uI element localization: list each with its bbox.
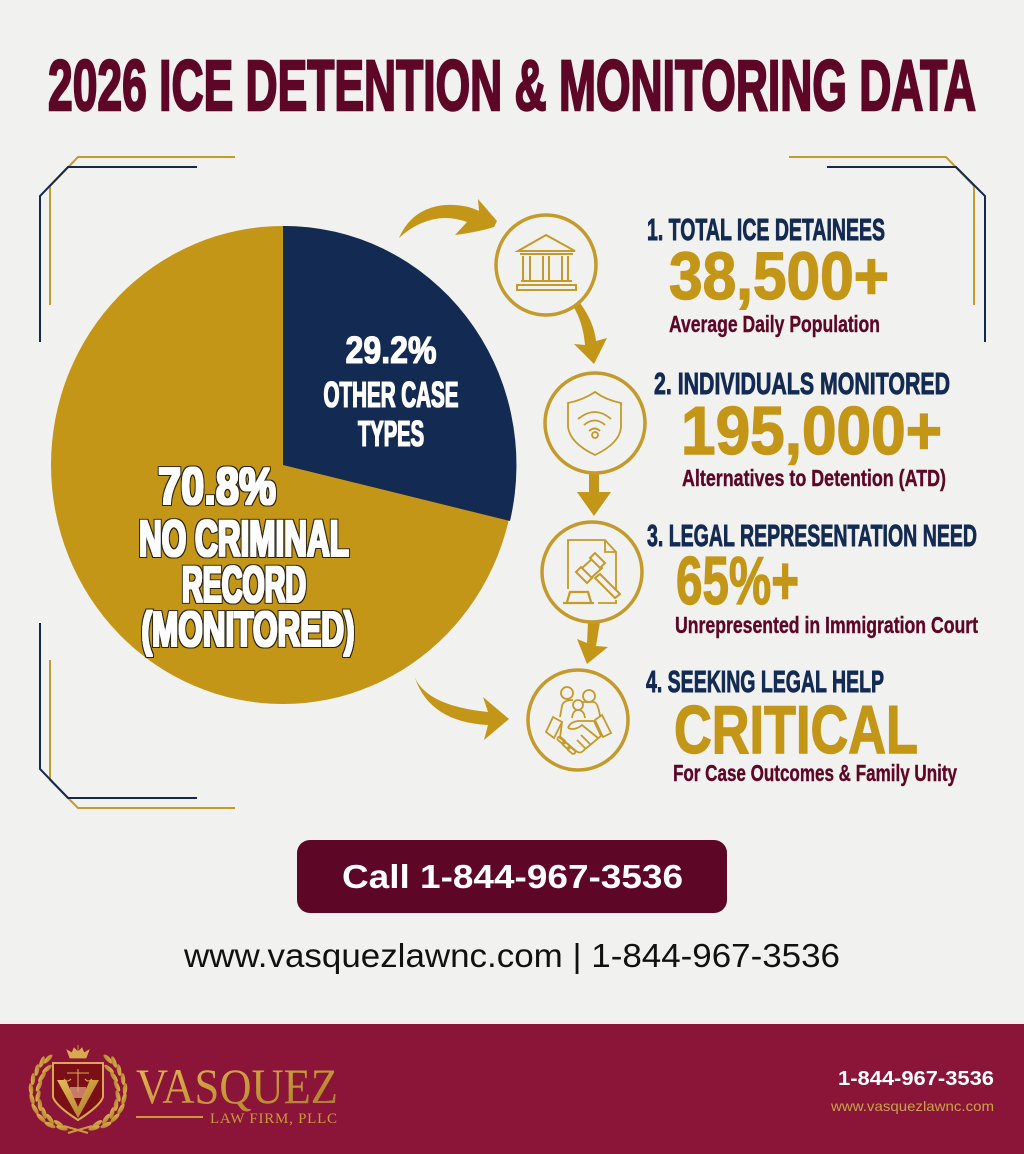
call button: Call 1-844-967-3536: [342, 858, 683, 895]
stat 1: total ICE detainees: Average Daily Population: [669, 311, 880, 337]
icon: courthouse: [496, 215, 596, 315]
label: 70.8% no criminal record: NO CRIMINAL: [139, 510, 349, 567]
label: 29.2% other case types: TYPES: [358, 413, 424, 454]
stat 2: individuals monitored: Alternatives to Detention (ATD): [682, 465, 946, 491]
label: 29.2% other case types: 29.2%: [346, 330, 436, 372]
label: 70.8% no criminal record: [139, 458, 354, 657]
stat 4: seeking legal help: 4. SEEKING LEGAL HELP: [646, 664, 884, 699]
footer band: [0, 1024, 1024, 1154]
arrow: pie to step 4: [415, 678, 509, 740]
label: 70.8% no criminal record: 70.8%: [158, 458, 276, 516]
label: 70.8% no criminal record: (MONITORED): [142, 603, 354, 657]
stat 1: total ICE detainees: 1. TOTAL ICE DETAINEES: [647, 212, 885, 247]
label: 29.2% other case types: [324, 330, 458, 454]
stat 4: seeking legal help: [646, 664, 957, 786]
scales: [64, 1069, 92, 1092]
laurel ribbons: [64, 1126, 92, 1133]
footer phone: 1-844-967-3536: [838, 1068, 994, 1090]
arrow: pie to step 1: [399, 199, 497, 238]
stat 3: legal representation need: 65%+: [676, 543, 799, 619]
pie chart: [51, 226, 516, 704]
footer website: www.vasquezlawnc.com: [830, 1098, 994, 1114]
stat 1: total ICE detainees: [647, 212, 889, 337]
laurel left: [28, 1053, 68, 1132]
arrow: step 2 to step 3: [577, 472, 611, 516]
logo wordmark: LAW FIRM, PLLC: [210, 1111, 337, 1127]
call button: [297, 840, 727, 913]
logo: crest with laurel: [28, 1045, 128, 1133]
label: 70.8% no criminal record: RECORD: [182, 556, 306, 613]
stat 2: individuals monitored: [654, 366, 950, 491]
V monogram: [57, 1080, 99, 1118]
icon: gavel and document: [542, 522, 642, 622]
stat 2: individuals monitored: 195,000+: [681, 393, 942, 469]
icon: family and handshake: [528, 670, 628, 770]
contact line: www.vasquezlawnc.com | 1-844-967-3536: [183, 937, 840, 974]
logo wordmark: VASQUEZ: [136, 1058, 338, 1114]
icon: shield with wifi: [545, 373, 645, 473]
crown: [67, 1045, 89, 1058]
arrow: step 3 to step 4: [577, 622, 608, 664]
decorative corner brackets: [40, 157, 985, 808]
stat 4: seeking legal help: CRITICAL: [674, 692, 918, 768]
laurel right: [88, 1053, 128, 1132]
stat 3: legal representation need: [647, 518, 978, 638]
stat 1: total ICE detainees: 38,500+: [669, 239, 889, 314]
shield: [53, 1063, 103, 1120]
arrow: step 1 to step 2: [573, 303, 607, 364]
label: 29.2% other case types: OTHER CASE: [324, 374, 458, 415]
pillar: [70, 1087, 86, 1098]
